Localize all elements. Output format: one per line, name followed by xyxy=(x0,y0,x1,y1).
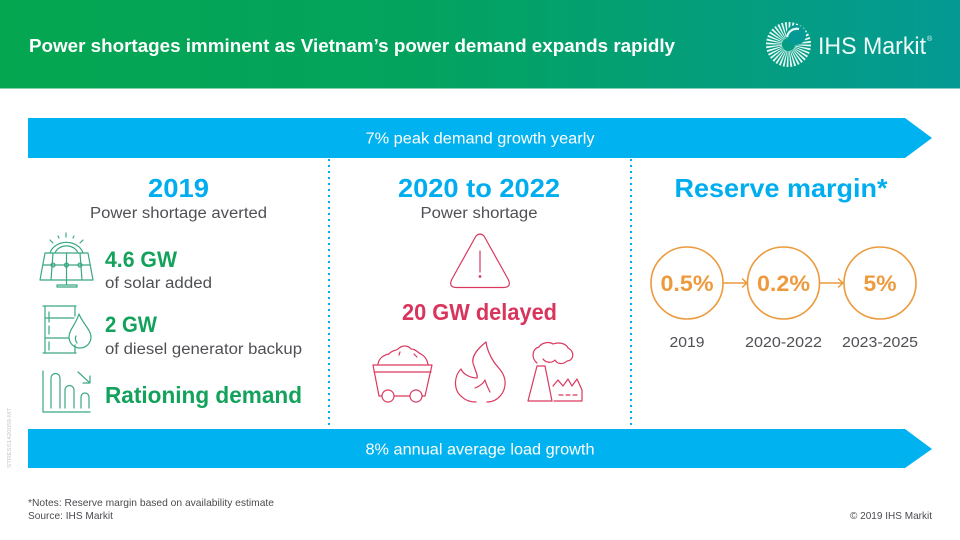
panel: 2019 xyxy=(40,173,302,412)
side reference code: STRESS1420059-MT xyxy=(7,407,13,468)
header band xyxy=(0,0,960,88)
bottom arrow: annual average load growth: 8% annual average load growth xyxy=(366,442,594,458)
heading: reserve margin: Reserve margin* xyxy=(674,173,888,203)
flow: 2019 circle xyxy=(651,247,723,351)
flow: 2020-2022 circle: 0.2% xyxy=(757,271,810,296)
icon: flame xyxy=(456,342,505,402)
text: 4.6 GW of solar added: of solar added xyxy=(105,275,212,292)
footnote: Source: IHS Markit xyxy=(28,510,113,522)
icon: coal cart xyxy=(373,346,432,402)
logo: IHS Markit xyxy=(774,25,933,60)
label: 20 GW delayed: 20 GW delayed xyxy=(402,299,557,325)
text: 4.6 GW of solar added xyxy=(105,247,212,292)
logo: IHS Markit: IHS Markit xyxy=(818,33,926,60)
text: 2 GW of diesel generator backup: of diesel generator backup xyxy=(105,341,302,358)
flow: 2019 circle: 0.5% xyxy=(660,271,714,296)
panel: 2020 to 2022 xyxy=(373,173,582,402)
bottom arrow: annual average load growth xyxy=(28,429,932,468)
flow: 2023-2025 circle: 2023-2025 xyxy=(842,334,918,351)
footnote: *Notes: Reserve margin based on availability estimate xyxy=(28,497,274,509)
flow: 2023-2025 circle: 5% xyxy=(864,271,896,296)
flow: 2020-2022 circle: 2020-2022 xyxy=(745,334,822,351)
label: rationing demand: Rationing demand xyxy=(105,382,302,408)
icon: falling bars xyxy=(43,371,90,412)
flow: 2020-2022 circle xyxy=(745,247,822,351)
icon: power plant xyxy=(528,343,582,401)
text: 4.6 GW of solar added: 4.6 GW xyxy=(105,247,177,272)
icon: warning triangle xyxy=(451,234,509,288)
footnote xyxy=(28,497,274,522)
top arrow: peak demand growth xyxy=(28,118,932,158)
text: 2 GW of diesel generator backup: 2 GW xyxy=(105,312,157,337)
subheading: power shortage: Power shortage xyxy=(420,205,538,222)
panel: reserve margin xyxy=(651,173,918,351)
arrow: 2020-2022 to 2023-2025 xyxy=(820,278,843,288)
dotted dividers xyxy=(329,159,631,428)
heading: 2020 to 2022: 2020 to 2022 xyxy=(398,173,560,203)
logo: IHS Markit: ® xyxy=(927,35,933,43)
title: Power shortages imminent as Vietnam’s power demand expands rapidly xyxy=(29,35,676,56)
arrow: 2019 to 2020-2022 xyxy=(723,278,747,288)
icon: solar panel xyxy=(40,233,93,287)
flow: 2023-2025 circle xyxy=(842,247,918,351)
text: 2 GW of diesel generator backup xyxy=(105,312,302,358)
top arrow: peak demand growth: 7% peak demand growth yearly xyxy=(366,130,595,148)
subheading: power shortage averted: Power shortage averted xyxy=(90,205,267,222)
icon: diesel barrel with drop xyxy=(43,306,91,353)
copyright: © 2019 IHS Markit xyxy=(850,510,932,522)
flow: 2019 circle: 2019 xyxy=(670,334,704,351)
heading: 2019: 2019 xyxy=(148,173,209,203)
